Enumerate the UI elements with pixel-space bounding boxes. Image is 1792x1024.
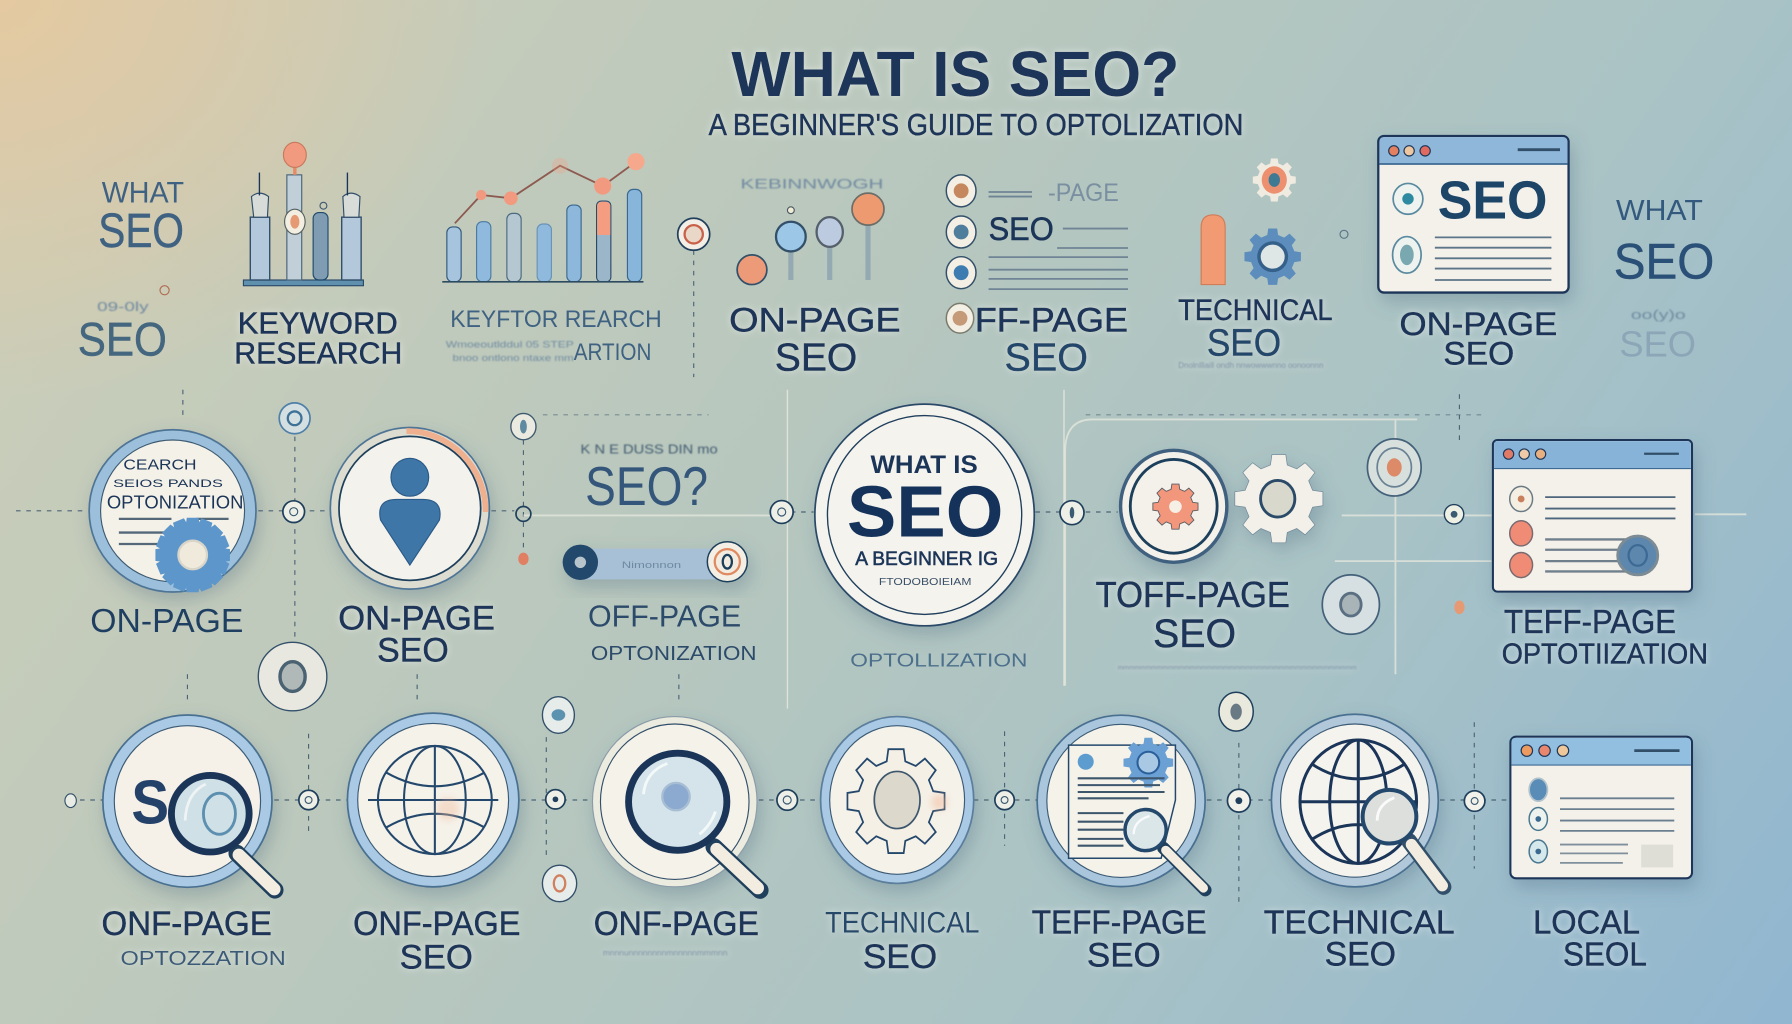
badge: globe magnifier: [1271, 714, 1443, 887]
label: onf-page third: [594, 905, 759, 957]
label: off-page optonization: [588, 599, 757, 665]
label: onf-page SEO: ONF-PAGE: [353, 905, 520, 943]
icon: keyword columns: [243, 142, 363, 286]
label: on-page SEO browser: SEO: [1443, 336, 1514, 372]
icon: gears badge: [1060, 450, 1323, 562]
badge: globe: [347, 713, 519, 887]
label: optollization: OPTOLLIZATION: [850, 650, 1027, 671]
icon: technical bar and gear: [1201, 159, 1348, 285]
text block: what SEO left: [98, 176, 184, 258]
label: on-page SEO top: SEO: [775, 336, 857, 379]
label: on-page SEO browser: [1400, 306, 1557, 372]
text block: faded SEO left: 09-0ly: [97, 300, 150, 314]
label: local SEOL: LOCAL: [1533, 904, 1640, 941]
label: onf-page SEO: [353, 905, 520, 976]
text block: faded SEO left: [78, 286, 169, 365]
label: keyword research: [234, 306, 402, 370]
label: toff-page SEO: TOFF-PAGE: [1096, 574, 1290, 615]
label: technical SEO top: SEO: [1207, 321, 1281, 363]
badge: search engine optimization: OPTONIZATION: [107, 492, 243, 513]
icon: small medallions row 2 left: [279, 403, 310, 523]
label: technical SEO right: TECHNICAL: [1264, 904, 1455, 941]
icon: on-page checklist: [946, 175, 1128, 333]
badge: central what is SEO: A BEGINNER IG: [855, 548, 998, 570]
text block: faded SEO right: oo(y)o: [1631, 308, 1686, 322]
label: off-page SEO top: SEO: [1005, 336, 1088, 379]
label: on-page left: ON-PAGE: [90, 603, 243, 640]
text block: SEO question: SEO?: [585, 455, 708, 517]
label: teff-page optotiization: TEFF-PAGE: [1504, 604, 1676, 641]
label: keyfor rearch: KEYFTOR REARCH: [450, 306, 662, 333]
label: onf-page third: ONF-PAGE: [594, 905, 759, 943]
icon: search pill: Nimonnon: [622, 560, 681, 570]
icon: keyword pins: [737, 177, 884, 285]
badge: search engine optimization: [89, 430, 256, 604]
label: toff-page SEO: [1096, 574, 1357, 672]
label: technical SEO row 3: [825, 907, 979, 976]
label: teff-page SEO row 3: [1032, 904, 1207, 975]
icon: search pill: [563, 542, 747, 582]
badge: search engine optimization: SEIOS PANDS: [113, 478, 223, 490]
label: onf-page optozzation: [101, 905, 286, 970]
label: local SEOL: [1533, 904, 1647, 974]
label: teff-page optotiization: OPTOTIIZATION: [1502, 638, 1708, 670]
icon: node medallion: [678, 218, 710, 250]
label: technical SEO row 3: TECHNICAL: [825, 907, 979, 940]
label: technical SEO row 3: SEO: [863, 938, 937, 976]
label: keyfor rearch: bnoo ontlono ntaxe mm: [453, 353, 574, 363]
label: local SEOL: SEOL: [1563, 937, 1647, 974]
badge: technical gear: [777, 717, 974, 883]
title: WHAT IS SEO?: [731, 38, 1179, 110]
label: technical SEO right: SEO: [1325, 936, 1396, 974]
label: keyword research: KEYWORD: [238, 306, 398, 341]
label: teff-page SEO row 3: TEFF-PAGE: [1032, 904, 1207, 941]
icon: connector medallions row 3: [542, 697, 577, 902]
badge: central what is SEO: WHAT IS: [871, 451, 978, 479]
label: off-page optonization: OPTONIZATION: [591, 642, 757, 665]
label: on-page SEO middle: SEO: [377, 632, 449, 670]
icon: keyword pins: KEBINNWOGH: [741, 177, 883, 192]
icon: connector nodes row 3 left: [65, 790, 318, 810]
label: technical SEO top: TECHNICAL: [1178, 294, 1333, 327]
text block: what SEO right: WHAT: [1616, 195, 1703, 227]
label: on-page SEO middle: [338, 600, 495, 670]
panel: browser window middle: [1493, 440, 1692, 592]
panel: browser window local: [1510, 737, 1692, 878]
chart: keyword bar chart: [442, 153, 645, 282]
label: technical SEO right: [1264, 904, 1455, 974]
icon: on-page checklist: SEO: [989, 211, 1054, 247]
text block: faded SEO right: SEO: [1619, 324, 1696, 365]
badge: SEO magnifier: [103, 715, 275, 890]
icon: connector medallions: [511, 413, 793, 565]
label: teff-page SEO row 3: SEO: [1087, 937, 1161, 975]
label: on-page SEO middle: ON-PAGE: [338, 600, 495, 638]
label: on-page SEO browser: ON-PAGE: [1400, 306, 1557, 342]
icon: node: [1464, 791, 1485, 811]
label: onf-page optozzation: OPTOZZATION: [120, 947, 286, 970]
icon: connector medallion right: [1219, 692, 1253, 812]
icon: node: [995, 790, 1014, 810]
icon: on-page checklist: -PAGE: [1048, 179, 1119, 207]
panel: SEO browser window: SEO: [1438, 170, 1547, 230]
badge: magnifier: [592, 717, 760, 890]
label: on-page SEO top: ON-PAGE: [729, 301, 901, 339]
badge: SEO magnifier: S: [131, 768, 169, 837]
label: technical SEO top: [1178, 294, 1333, 370]
badge: search engine optimization: CEARCH: [123, 458, 197, 474]
text block: what SEO left: WHAT: [102, 176, 184, 209]
label: off-page SEO top: FF-PAGE: [975, 301, 1128, 339]
label: keyfor rearch: [446, 306, 662, 366]
label: off-page optonization: OFF-PAGE: [588, 599, 741, 634]
text block: faded SEO left: SEO: [78, 313, 167, 365]
label: toff-page SEO: mmmmmmmmmmmmmmmmmmmmmmmmmmmmmmmmmmmmmmmmmmm: [1118, 665, 1357, 672]
label: onf-page SEO: SEO: [400, 938, 473, 976]
panel: SEO browser window: [1378, 136, 1569, 293]
label: technical SEO top: Dnolnlllaill ondh nnwowwwnno oonoonnn: [1178, 361, 1323, 370]
text block: what SEO right: SEO: [1614, 232, 1714, 289]
label: teff-page optotiization: [1502, 604, 1708, 670]
text block: SEO question: K N E DUSS DIN mo: [581, 443, 718, 457]
label: on-page SEO top: [729, 301, 901, 379]
subtitle: A BEGINNER'S GUIDE TO OPTOLIZATION: [709, 107, 1243, 142]
label: onf-page optozzation: ONF-PAGE: [101, 905, 272, 943]
text block: what SEO right: [1614, 195, 1714, 289]
badge: person: [330, 428, 489, 589]
icon: right medallions: [1322, 439, 1465, 634]
badge: document and magnifier: [1037, 715, 1205, 890]
badge: central what is SEO: FTODOBOIEIAM: [879, 577, 971, 588]
text block: what SEO left: SEO: [98, 205, 184, 258]
badge: central what is SEO: [815, 404, 1034, 626]
label: keyfor rearch: ARTION: [574, 339, 651, 366]
icon: medallion below: [258, 642, 327, 711]
label: off-page SEO top: [975, 301, 1128, 379]
label: keyword research: RESEARCH: [234, 335, 402, 370]
label: keyfor rearch: Wmoeoutlddul 05 STEP: [446, 339, 574, 349]
connector lines: [16, 250, 1746, 903]
label: onf-page third: mnnnunnnnnnnnmnnnnnmmmnn: [603, 948, 727, 957]
label: toff-page SEO: SEO: [1153, 612, 1236, 656]
badge: central what is SEO: SEO: [847, 473, 1003, 553]
